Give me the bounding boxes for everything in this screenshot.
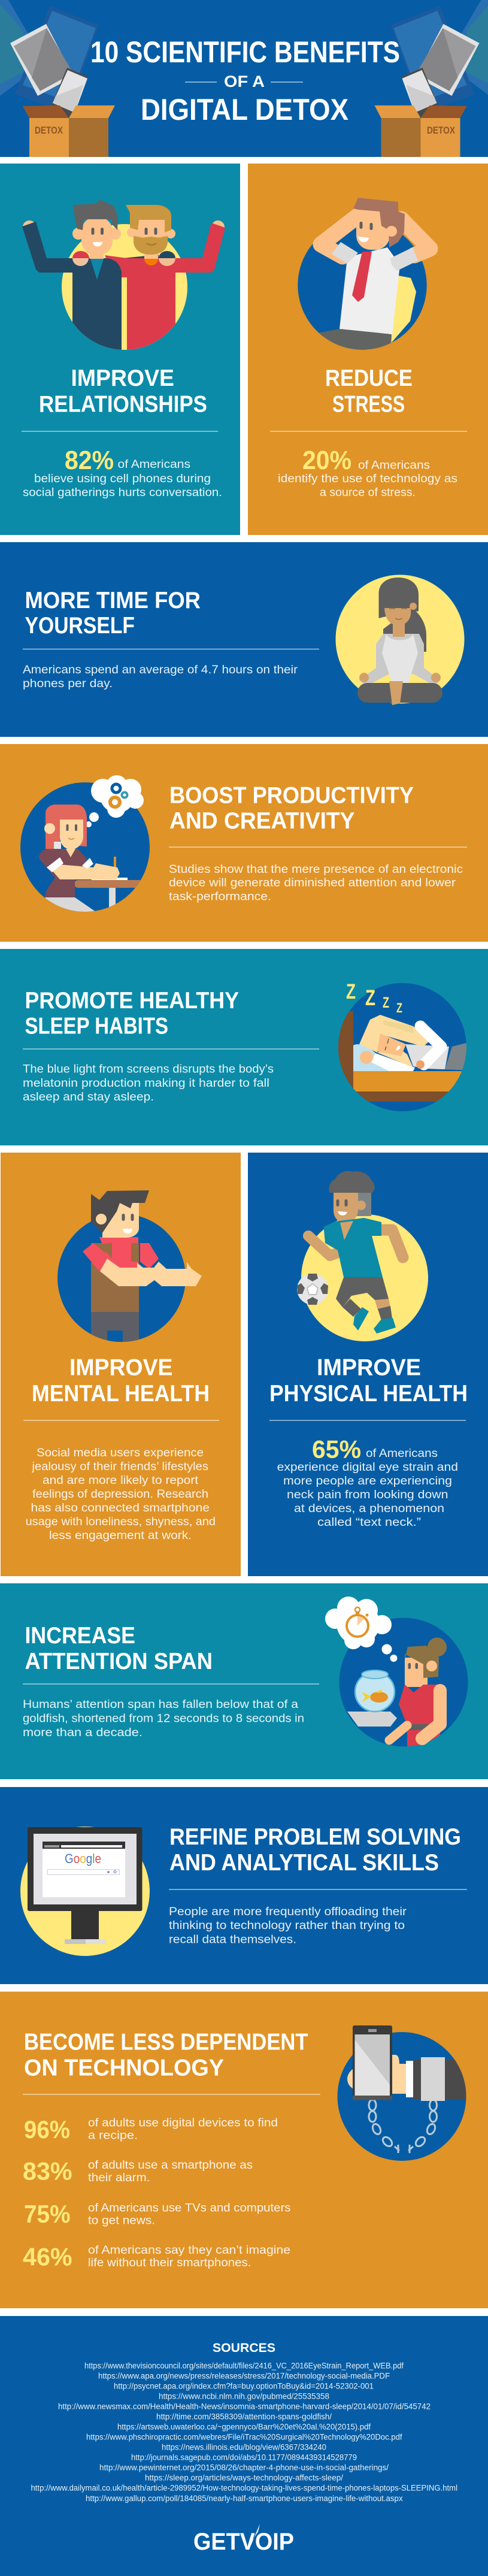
source list: https://www.thevisioncouncil.org/sites/default/files/2416_VC_2016EyeStrain_Report_WEB.pdf <box>84 2361 404 2370</box>
source list: https://news.illinois.edu/blog/view/6367/334240 <box>162 2442 326 2451</box>
heading: MENTAL HEALTH <box>32 1381 210 1407</box>
stat text: of Americans <box>117 458 190 471</box>
icon: relaxed man <box>298 198 430 359</box>
icon: meditating woman <box>335 575 465 705</box>
heading: ATTENTION SPAN <box>25 1649 213 1674</box>
body text: thinking to technology rather than trying to <box>169 1919 405 1932</box>
stat: 46% <box>23 2243 290 2270</box>
heading: PHYSICAL HEALTH <box>269 1381 468 1407</box>
heading: IMPROVE <box>71 365 174 391</box>
panel: improve mental health <box>1 1153 241 1576</box>
title <box>90 35 400 126</box>
source list: http://time.com/3858309/attention-spans-goldfish/ <box>156 2412 332 2421</box>
icon: woman writing with idea cloud <box>20 775 150 917</box>
stat text: of Americans <box>366 1447 438 1460</box>
body text: Social media users experience <box>37 1447 204 1459</box>
stat text: experience digital eye strain and <box>277 1461 458 1474</box>
stat: 96%: of adults use digital devices to find <box>88 2117 278 2129</box>
body text: The blue light from screens disrupts the body’s <box>23 1063 274 1076</box>
body text: goldfish, shortened from 12 seconds to 8 seconds in <box>23 1712 304 1725</box>
panel: reduce stress <box>248 164 488 535</box>
stat text: at devices, a phenomenon <box>294 1502 444 1515</box>
source list: https://www.phschiropractic.com/webres/File/iTrac%20Surgical%20Technology%20Doc.pdf <box>86 2432 402 2441</box>
body text <box>23 664 298 690</box>
heading: REDUCE <box>325 365 413 391</box>
title: DIGITAL DETOX <box>141 93 348 126</box>
icon: monitor with search page <box>20 1827 150 1956</box>
body text: less engagement at work. <box>49 1529 192 1542</box>
heading: IMPROVE <box>317 1355 421 1381</box>
title: OF A <box>224 72 265 90</box>
source list: http://journals.sagepub.com/doi/abs/10.1177/0894439314528779 <box>131 2453 357 2462</box>
stat text: a source of stress. <box>320 486 416 499</box>
source list <box>31 2361 457 2503</box>
title: 10 SCIENTIFIC BENEFITS <box>90 35 400 69</box>
source list: http://www.dailymail.co.uk/health/article-2989952/How-technology-taking-lives-spend-time-phones-laptops-SLEEPING.html <box>31 2483 457 2492</box>
body text <box>23 1063 274 1103</box>
stat text: called “text neck.” <box>317 1516 421 1529</box>
heading <box>24 2030 308 2081</box>
stat: 75% <box>24 2200 291 2228</box>
body text: and are more likely to report <box>43 1474 199 1487</box>
stat: 46%: 46% <box>23 2243 72 2270</box>
icon: woman, goldfish and stopwatch <box>325 1597 468 1749</box>
z letters <box>346 980 402 1015</box>
body text <box>23 1698 304 1739</box>
panel: more time for yourself <box>0 542 488 737</box>
box label left: DETOX <box>35 125 63 136</box>
stat: 83%: 83% <box>23 2157 72 2185</box>
icon: devices in detox box left <box>0 0 115 157</box>
body text: recall data themselves. <box>169 1934 296 1946</box>
icon: soccer player <box>297 1171 428 1341</box>
panel: become less dependent <box>0 1991 488 2308</box>
thought cloud <box>325 1597 398 1662</box>
heading <box>25 588 201 639</box>
heading <box>269 1355 468 1407</box>
body text: phones per day. <box>23 678 113 690</box>
heading: BECOME LESS DEPENDENT <box>24 2030 308 2055</box>
panel: header <box>0 0 488 157</box>
heading: INCREASE <box>25 1623 135 1649</box>
z letters: Z <box>365 985 375 1010</box>
z letters: Z <box>396 1000 402 1015</box>
heading <box>39 365 207 417</box>
stat: 96%: 96% <box>24 2115 70 2143</box>
body text: usage with loneliness, shyness, and <box>26 1516 216 1528</box>
stat: 75%: 75% <box>24 2200 71 2228</box>
heading: REFINE PROBLEM SOLVING <box>169 1824 461 1850</box>
body text: device will generate diminished attention and lower <box>169 877 456 889</box>
heading <box>32 1355 210 1407</box>
heading <box>325 365 413 417</box>
stat text: neck pain from looking down <box>287 1489 448 1501</box>
logo: GetVoIP: GETVOIP <box>193 2529 294 2555</box>
heading: BOOST PRODUCTIVITY <box>169 783 414 809</box>
google logo: Google <box>65 1851 101 1866</box>
source list: http://www.pewinternet.org/2015/08/26/chapter-4-phone-use-in-social-gatherings/ <box>99 2463 389 2472</box>
source list: https://sleep.org/articles/ways-technology-affects-sleep/ <box>145 2473 343 2482</box>
heading: MORE TIME FOR <box>25 588 201 613</box>
body text: People are more frequently offloading their <box>169 1906 407 1918</box>
heading: PROMOTE HEALTHY <box>25 988 239 1014</box>
heading: IMPROVE <box>69 1355 172 1381</box>
stat text <box>277 1435 458 1529</box>
body text: melatonin production making it harder to fall <box>23 1077 269 1090</box>
goldfish bowl <box>355 1670 395 1712</box>
source list: https://www.ncbi.nlm.nih.gov/pubmed/25535358 <box>159 2391 329 2400</box>
stat: 46%: of Americans say they can’t imagine <box>88 2244 290 2257</box>
body text <box>169 863 463 903</box>
stat text: 20% <box>302 446 351 475</box>
heading <box>169 1824 461 1876</box>
panel: improve relationships <box>0 164 240 535</box>
icon: phone chained to hand <box>338 2025 470 2161</box>
sources heading: SOURCES <box>213 2341 275 2355</box>
stat: 83%: their alarm. <box>88 2172 150 2184</box>
icon: sleeping person <box>335 980 473 1111</box>
body text: task-performance. <box>169 891 271 903</box>
heading <box>169 783 414 834</box>
heading <box>25 988 239 1039</box>
body text: has also connected smartphone <box>31 1502 210 1514</box>
body text: asleep and stay asleep. <box>23 1091 154 1103</box>
body text: Humans’ attention span has fallen below that of a <box>23 1698 298 1711</box>
box label right: DETOX <box>427 125 456 136</box>
heading: YOURSELF <box>25 613 135 639</box>
heading: SLEEP HABITS <box>25 1014 168 1039</box>
stat text <box>23 446 222 499</box>
stat text: identify the use of technology as <box>278 473 457 485</box>
stat: 96% <box>24 2115 278 2143</box>
stat text: social gatherings hurts conversation. <box>23 486 222 499</box>
heading: AND CREATIVITY <box>169 808 354 834</box>
panel: boost productivity <box>0 744 488 942</box>
stat: 75%: of Americans use TVs and computers <box>88 2202 291 2214</box>
icon: ball <box>297 1274 328 1305</box>
stat text: more people are experiencing <box>283 1475 452 1487</box>
body text: jealousy of their friends’ lifestyles <box>31 1461 208 1473</box>
panel: promote healthy sleep habits <box>0 949 488 1145</box>
body text <box>169 1906 407 1946</box>
body text: feelings of depression. Research <box>32 1488 208 1501</box>
stat text: believe using cell phones during <box>34 473 211 485</box>
stat: 75%: to get news. <box>88 2214 155 2227</box>
stat text: of Americans <box>358 459 430 472</box>
stat text: 82% <box>65 446 114 475</box>
source list: http://psycnet.apa.org/index.cfm?fa=buy.optionToBuy&id=2014-52302-001 <box>114 2381 374 2390</box>
stat: 96%: a recipe. <box>88 2130 138 2142</box>
stat text: 65% <box>312 1435 361 1463</box>
heading: RELATIONSHIPS <box>39 392 207 417</box>
heading: STRESS <box>332 392 405 417</box>
icon: two friends <box>22 199 225 359</box>
stat: 46%: life without their smartphones. <box>88 2257 251 2269</box>
panel: improve physical health <box>248 1153 488 1576</box>
heading: AND ANALYTICAL SKILLS <box>169 1850 439 1876</box>
stat text <box>278 446 457 499</box>
source list: http://www.gallup.com/poll/184085/nearly-half-smartphone-users-imagine-life-without.aspx <box>86 2494 403 2503</box>
stat: 83% <box>23 2157 253 2185</box>
source list: http://www.newsmax.com/Health/Health-News/insomnia-smartphone-harvard-sleep/2014/01/07/id/545742 <box>58 2402 431 2411</box>
thought cloud <box>86 775 144 827</box>
icon: devices in detox box right <box>375 0 488 157</box>
stopwatch <box>347 1607 369 1637</box>
body text: Americans spend an average of 4.7 hours on their <box>23 664 298 676</box>
body text: more than a decade. <box>23 1727 143 1739</box>
heading <box>25 1623 213 1674</box>
body text: Studies show that the mere presence of an electronic <box>169 863 463 876</box>
panel: refine problem solving <box>0 1787 488 1984</box>
body text <box>26 1447 216 1542</box>
panel: sources <box>0 2316 488 2576</box>
panel: increase attention span <box>0 1583 488 1779</box>
source list: https://artsweb.uwaterloo.ca/~gpennyco/Barr%20et%20al.%20(2015).pdf <box>117 2422 371 2431</box>
z letters: Z <box>346 980 356 1003</box>
source list: https://www.apa.org/news/press/releases/stress/2017/technology-social-media.PDF <box>98 2371 390 2380</box>
heading: ON TECHNOLOGY <box>24 2055 224 2081</box>
z letters: Z <box>383 994 389 1011</box>
stat: 83%: of adults use a smartphone as <box>88 2159 253 2172</box>
icon: man with thumb <box>57 1190 202 1345</box>
